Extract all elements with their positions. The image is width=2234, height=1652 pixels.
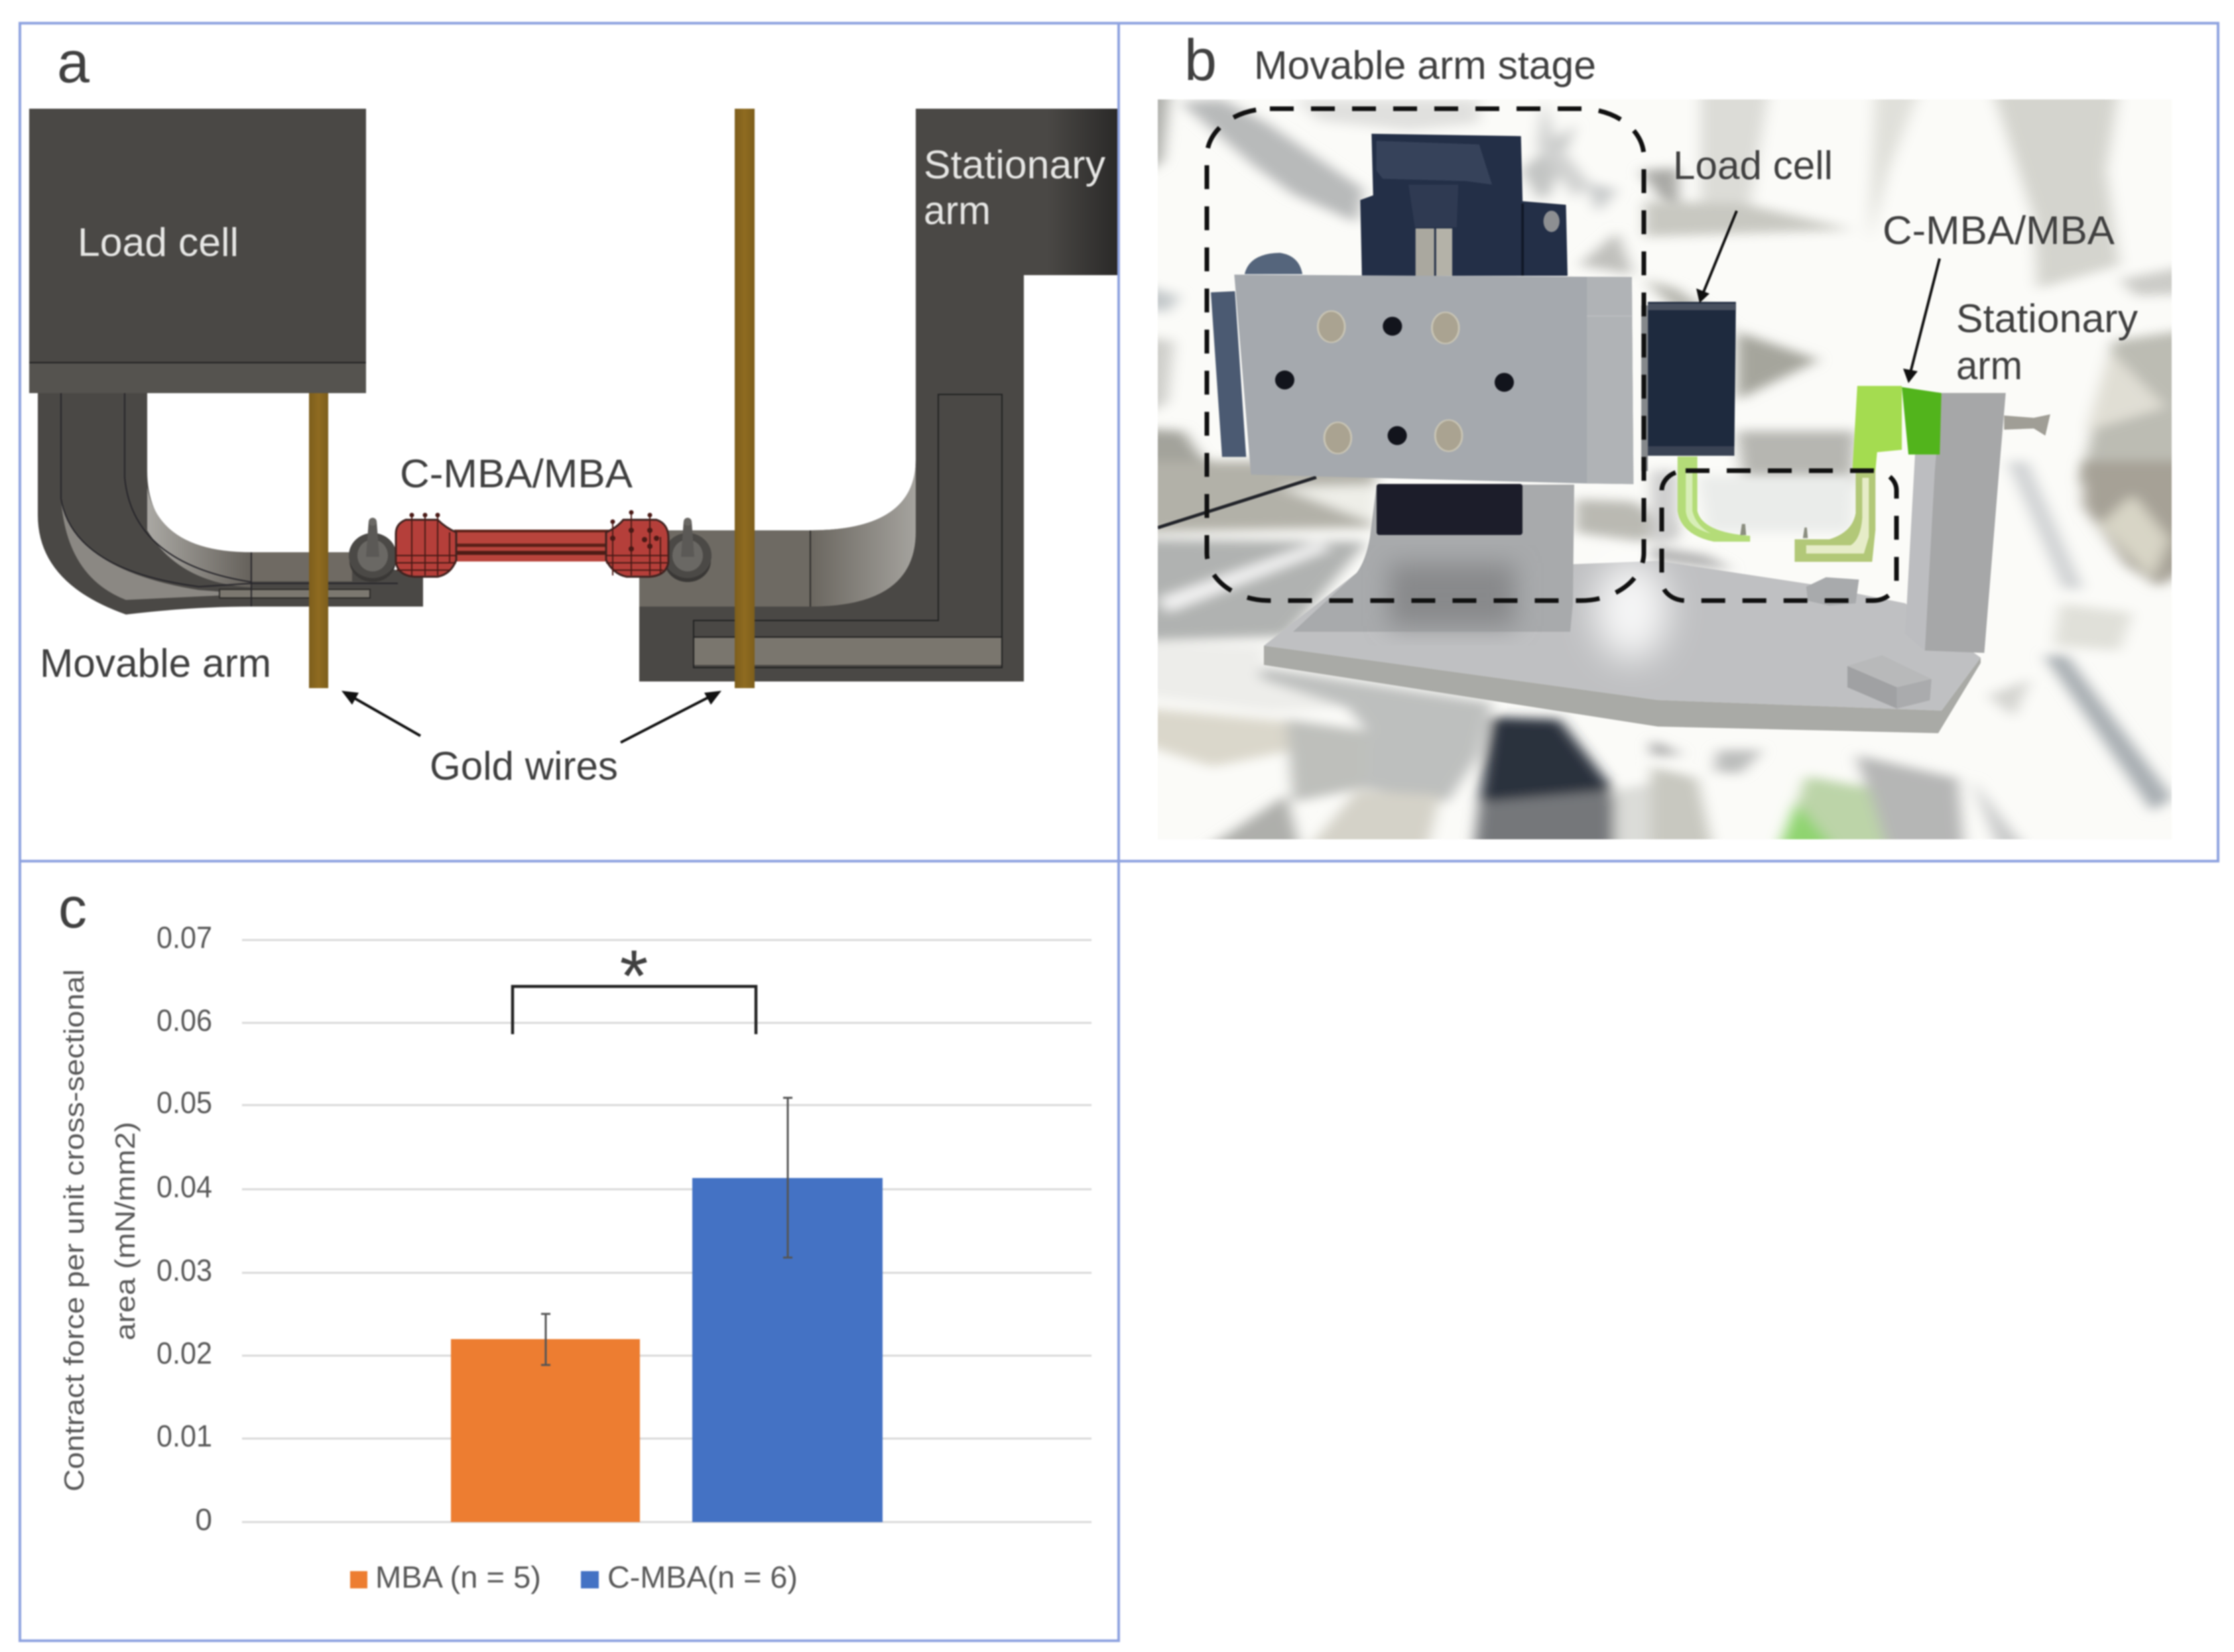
stationary arm bbox=[639, 109, 1118, 681]
error bar: C-MBA bbox=[783, 1098, 792, 1258]
y axis tick labels: 0.04 bbox=[156, 1169, 212, 1204]
y axis tick labels: 0.02 bbox=[156, 1336, 212, 1370]
y axis title: Contract force per unit cross-sectional bbox=[58, 969, 90, 1492]
load cell block bbox=[29, 109, 366, 393]
y axis tick labels: 0 bbox=[195, 1502, 212, 1537]
label: C-MBA/MBA: C-MBA/MBA bbox=[1883, 208, 2115, 253]
y axis tick labels: 0.05 bbox=[156, 1085, 212, 1120]
label: gold wires: Gold wires bbox=[430, 744, 618, 788]
arrow to C-MBA/MBA bbox=[1903, 259, 1940, 383]
y axis tick labels: 0.06 bbox=[156, 1003, 212, 1037]
label: stationary arm: Stationary bbox=[1956, 296, 2138, 341]
foil background, upper right bbox=[1644, 86, 2192, 483]
error bar: MBA bbox=[541, 1314, 550, 1365]
label: load cell: Load cell bbox=[78, 220, 239, 265]
panel b: photograph of the measurement device bbox=[1119, 23, 2218, 861]
left dark block and knob bbox=[1211, 253, 1302, 457]
screws bbox=[1318, 311, 1462, 453]
green specimen arms bbox=[1678, 457, 1875, 561]
label: C-MBA/MBA: C-MBA/MBA bbox=[400, 451, 633, 496]
y axis title bbox=[58, 969, 141, 1492]
label: stationary arm: Stationary bbox=[924, 143, 1105, 187]
label: movable arm stage: Movable arm stage bbox=[1254, 43, 1596, 88]
bar: MBA bbox=[451, 1339, 640, 1522]
panel a: schematic of force measurement setup bbox=[20, 23, 1119, 861]
gridlines bbox=[242, 940, 1091, 1522]
holes bbox=[1275, 317, 1514, 445]
base plate bbox=[1264, 560, 1981, 733]
legend: MBA (n = 5) bbox=[375, 1560, 541, 1594]
significance asterisk: * bbox=[620, 935, 648, 1017]
stationary column, green clamp and screw bbox=[1852, 386, 2050, 653]
label: load cell: Load cell bbox=[1673, 143, 1833, 188]
foil background, lower left bbox=[1139, 461, 1678, 859]
bar: C-MBA bbox=[692, 1178, 883, 1522]
foil background, lower right bbox=[1651, 461, 2192, 855]
photo scene bbox=[1139, 86, 2192, 859]
panel letter a: a bbox=[57, 29, 90, 95]
aluminium stage plate bbox=[1234, 274, 1633, 484]
stand under stage bbox=[1293, 485, 1574, 632]
y axis tick labels: 0.07 bbox=[156, 920, 212, 955]
cable bbox=[1158, 477, 1316, 528]
panel letter b: b bbox=[1184, 27, 1217, 93]
C-MBA/MBA red specimen bbox=[396, 510, 668, 577]
knobs holding specimen bbox=[349, 518, 712, 582]
panel c: bar chart of contractile force bbox=[20, 861, 1119, 1641]
arrow to load cell bbox=[1696, 211, 1737, 303]
lower dark stage block bbox=[1377, 484, 1522, 535]
load cell bbox=[1641, 302, 1736, 471]
arrows to gold wires bbox=[341, 691, 721, 742]
foil background, upper left bbox=[1139, 86, 1678, 488]
significance bracket bbox=[513, 986, 756, 1034]
gold wires bbox=[309, 109, 755, 688]
movable arm bbox=[38, 393, 423, 615]
y axis tick labels: 0.03 bbox=[156, 1253, 212, 1287]
dashed box: specimen region bbox=[1662, 471, 1896, 601]
y axis tick labels bbox=[156, 920, 212, 1537]
label: stationary arm: arm bbox=[1956, 343, 2022, 388]
y axis tick labels: 0.01 bbox=[156, 1419, 212, 1453]
dashed box: movable arm stage bbox=[1207, 109, 1644, 601]
legend: C-MBA(n = 6) bbox=[607, 1560, 798, 1594]
legend bbox=[350, 1560, 798, 1594]
label: movable arm: Movable arm bbox=[40, 641, 271, 685]
dark stage upper body bbox=[1360, 134, 1568, 276]
y axis title: area (mN/mm2) bbox=[109, 1122, 141, 1340]
panel letter c: c bbox=[58, 876, 87, 940]
label: stationary arm: arm bbox=[924, 188, 991, 233]
small cubes on base bbox=[1806, 577, 1932, 709]
